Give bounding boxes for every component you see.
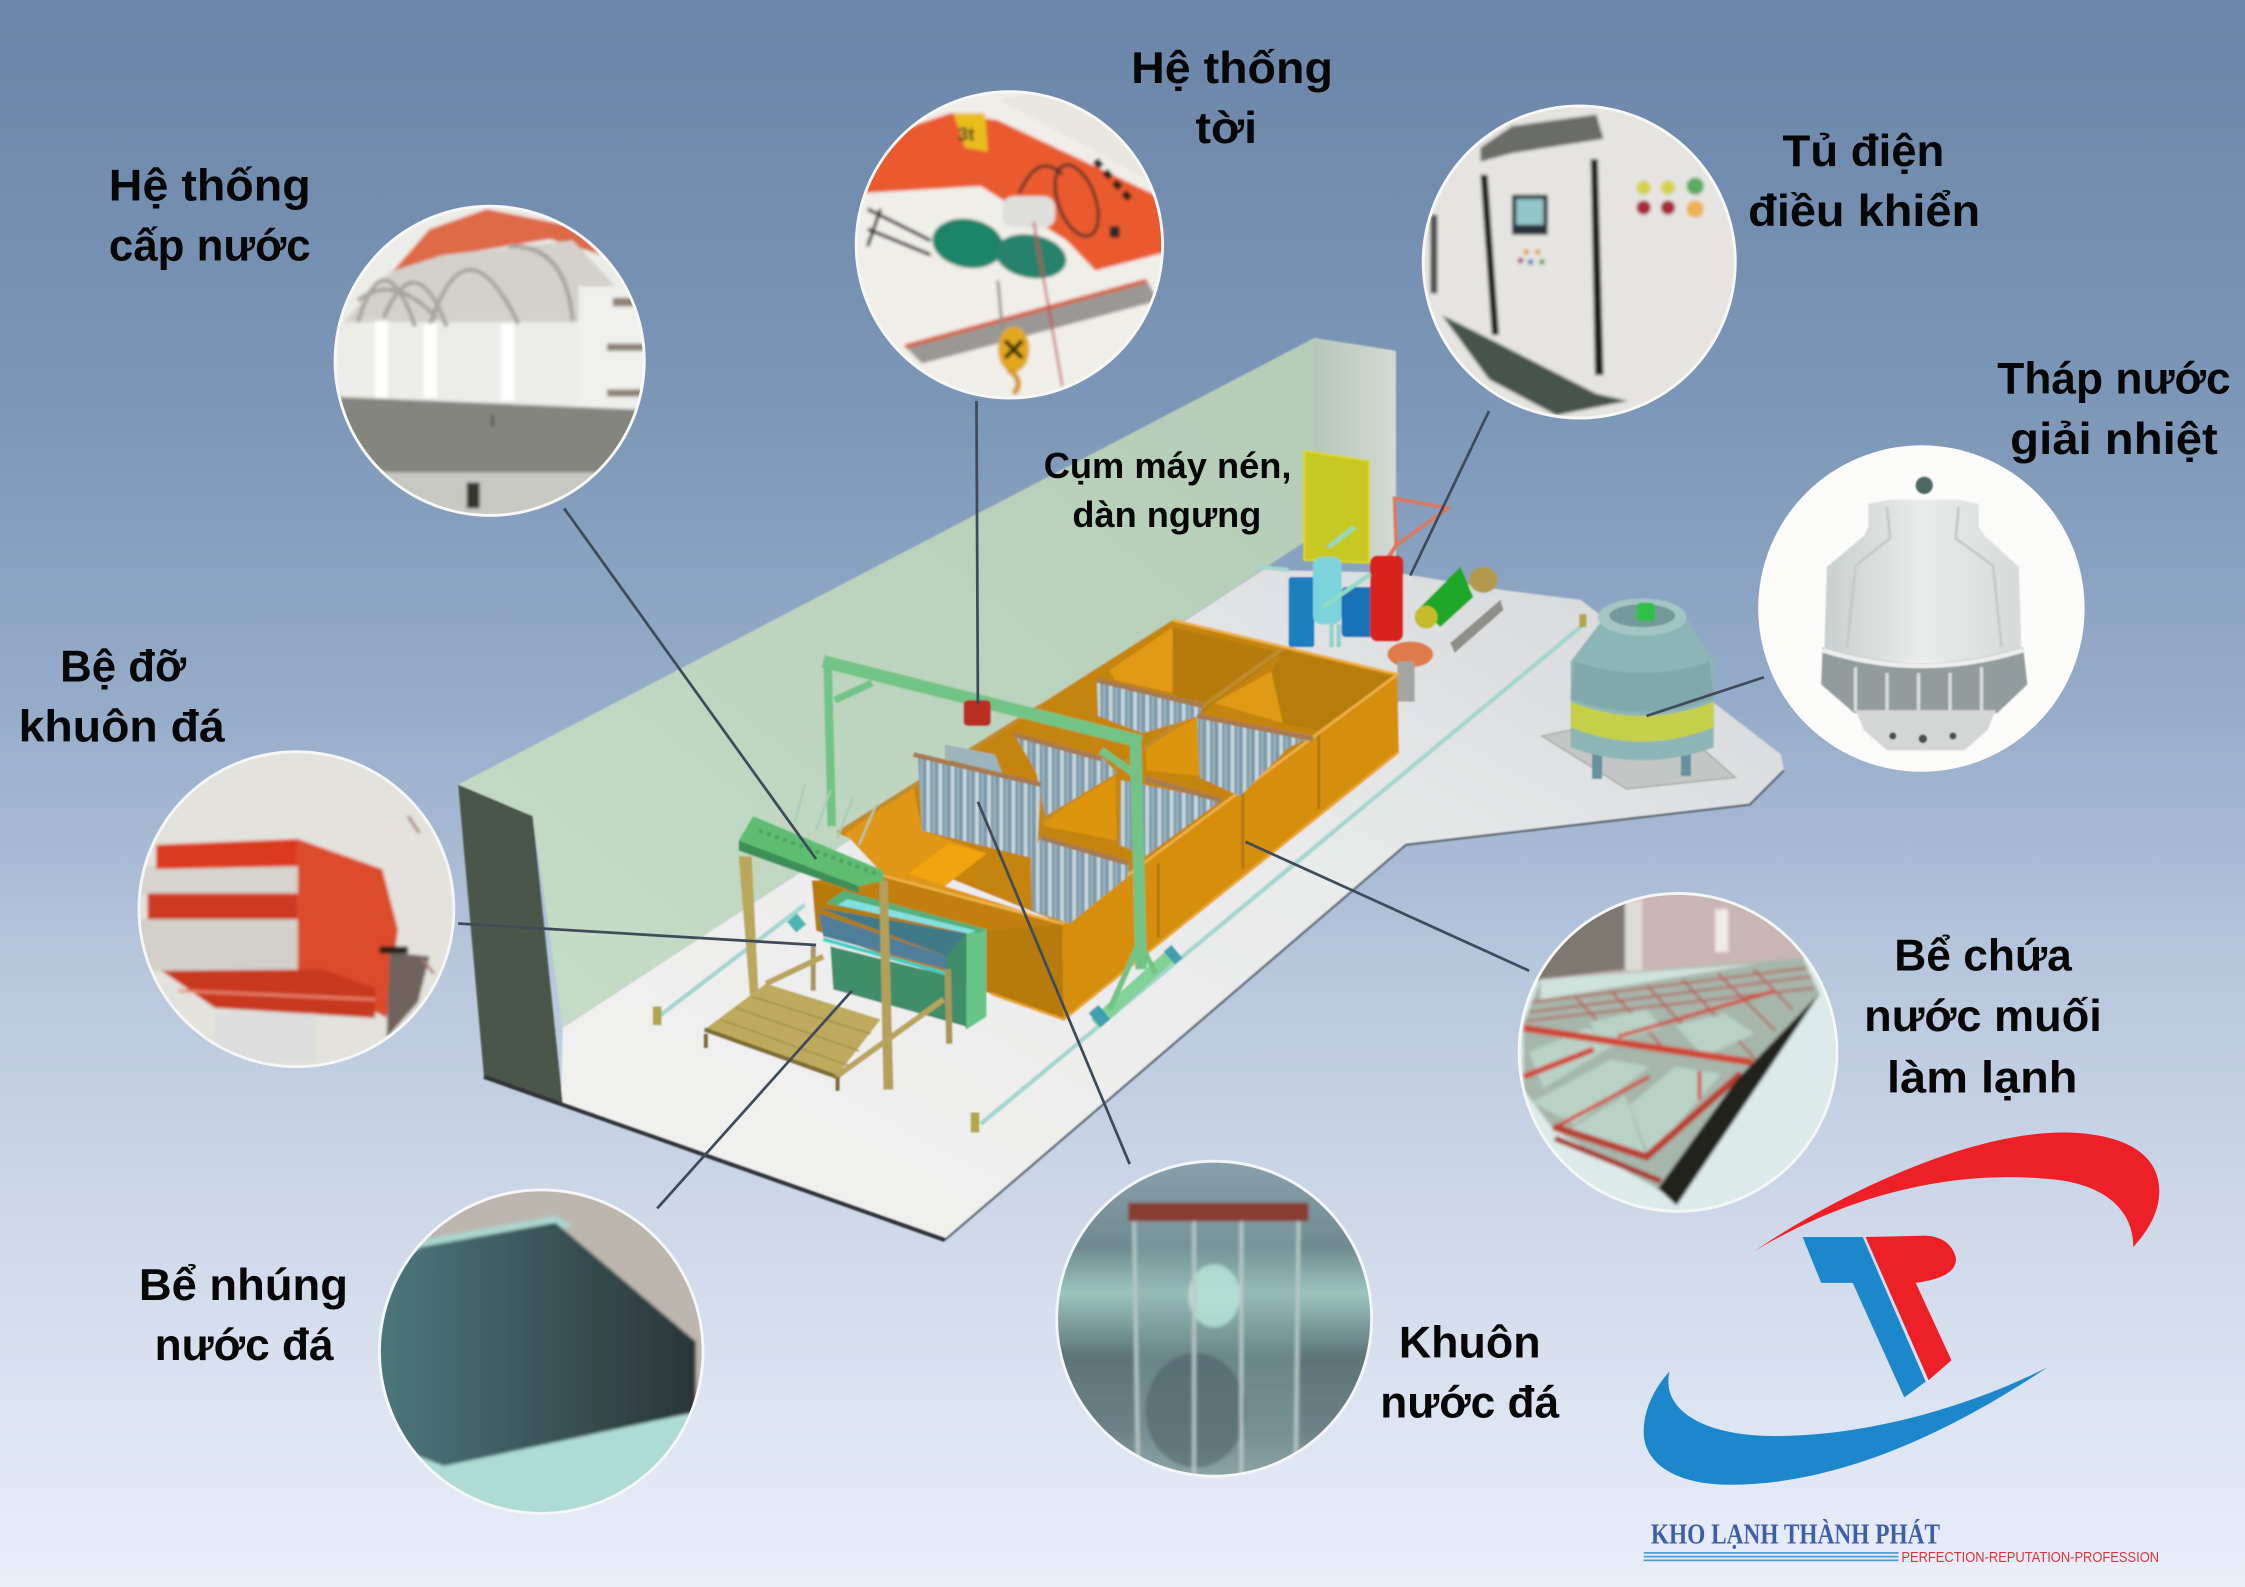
rail carriage: [1089, 1005, 1110, 1027]
label: brine tank: làm lạnh: [1887, 1053, 2077, 1102]
leader lines: [458, 401, 1764, 1208]
label: compressor and condenser: dàn ngưng: [1072, 495, 1261, 535]
dark wall end: [458, 785, 563, 1102]
leader: control panel: [1410, 411, 1489, 576]
label: ice dip tank: [139, 1261, 348, 1370]
logo: triple rule: [1644, 1552, 1899, 1561]
label: ice mold: [1380, 1318, 1559, 1427]
tank right face: [1062, 674, 1399, 1019]
label: compressor and condenser: Cụm máy nén,: [1044, 446, 1291, 486]
orange brine tank: [812, 620, 1399, 1019]
leader: cooling tower: [1647, 677, 1764, 716]
photo: water supply system: [329, 200, 651, 523]
logo: red swoosh: [1754, 1133, 2159, 1251]
leader: hoist: [976, 401, 978, 704]
rail carriage 3: [787, 913, 806, 933]
label: mold support: [19, 643, 225, 752]
right end wall: [1314, 338, 1396, 576]
photo: mold support: [136, 750, 458, 1072]
red hoist: [964, 700, 991, 726]
label: ice dip tank: nước đá: [155, 1321, 334, 1370]
water supply frame: [739, 785, 893, 1090]
logo: company name: KHO LẠNH THÀNH PHÁT: [1651, 1517, 1940, 1550]
tank interior: [838, 620, 1397, 924]
logo: Kho Lạnh Thành Phát: [1644, 1133, 2159, 1566]
photo: hoist system: 3t: [958, 123, 974, 144]
label: hoist system: tời: [1196, 104, 1257, 153]
logo: blue T: [1803, 1237, 1926, 1397]
label: brine tank: Bể chứa: [1894, 932, 2072, 981]
label: cooling tower: giải nhiệt: [2010, 415, 2218, 464]
label: cooling tower: [1997, 355, 2231, 464]
label: ice mold: nước đá: [1380, 1378, 1559, 1427]
label: water supply: cấp nước: [109, 222, 311, 271]
label: compressor and condenser: [1044, 446, 1291, 535]
compressor group: [1289, 451, 1503, 702]
photo: ice dip tank: [375, 1181, 707, 1518]
rail carriage 2: [1164, 945, 1182, 965]
cooling tower 3D: [1542, 598, 1735, 789]
label: water supply: Hệ thống: [109, 161, 311, 210]
photo: ice mold: [1052, 1157, 1376, 1480]
leader: brine tank: [1246, 842, 1529, 971]
ice mold banks: [913, 679, 1313, 924]
label: ice mold: Khuôn: [1399, 1318, 1541, 1367]
floor front edges: [484, 1077, 945, 1240]
logo: red P: [1866, 1236, 1956, 1380]
floor rails: [659, 567, 1582, 1124]
logo: blue swoosh: [1644, 1367, 2047, 1485]
rail stops: [653, 614, 1586, 1133]
label: mold support: khuôn đá: [19, 703, 225, 752]
leader: ice mold: [978, 802, 1130, 1164]
dip tank 3D: [819, 891, 986, 1029]
label: hoist system: Hệ thống: [1131, 44, 1333, 93]
3D plant scene: [458, 338, 1784, 1240]
label: control panel: Tủ điện: [1783, 127, 1944, 176]
label: control panel: điều khiển: [1748, 187, 1980, 236]
label: control panel: [1748, 127, 1980, 236]
photo: brine tank: [1518, 888, 1840, 1217]
long green wall: [458, 338, 1314, 1028]
label: brine tank: nước muối: [1864, 992, 2102, 1041]
leader: water supply: [564, 508, 816, 859]
leader: dip tank: [657, 991, 852, 1208]
label: water supply: [109, 161, 311, 271]
photo: cooling tower: [1758, 445, 2085, 772]
leader: mold support: [458, 924, 816, 945]
label: hoist system: [1131, 44, 1333, 153]
label: brine tank: [1864, 932, 2102, 1102]
photo: control panel: [1417, 100, 1747, 430]
logo: tagline: PERFECTION-REPUTATION-PROFESSION: [1901, 1550, 2159, 1566]
wooden platform: [704, 956, 949, 1091]
label: ice dip tank: Bể nhúng: [139, 1261, 348, 1310]
photo: hoist system: [852, 86, 1174, 408]
label: cooling tower: Tháp nước: [1997, 355, 2231, 404]
label: mold support: Bệ đỡ: [60, 643, 187, 692]
green gantry crane: [823, 660, 1174, 1024]
tank left face: [812, 881, 1064, 1019]
floor: [561, 570, 1784, 1240]
